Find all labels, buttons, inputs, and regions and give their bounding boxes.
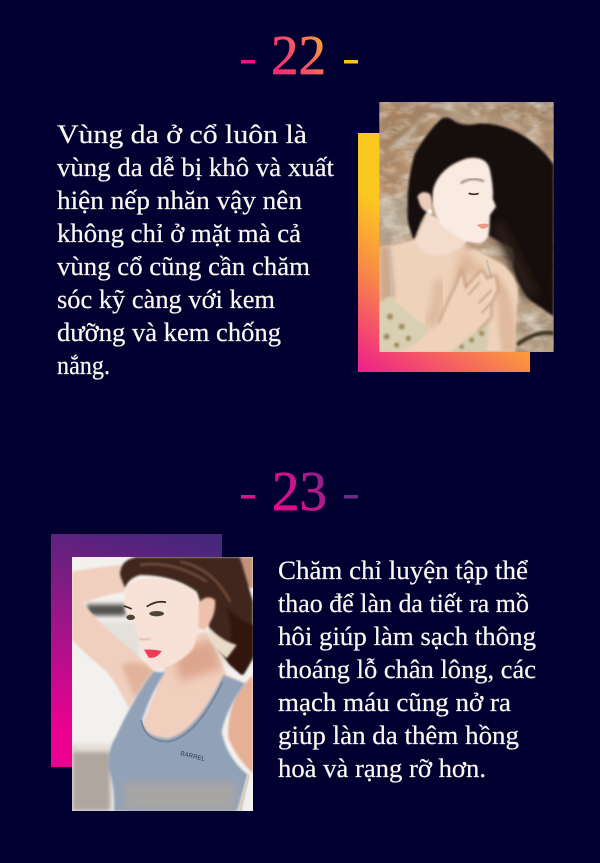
text block: exercise tip: Chăm chỉ luyện tập thể xyxy=(278,555,528,585)
heading: number 23: 23 xyxy=(272,461,327,523)
tank top xyxy=(108,672,248,811)
text block: neck care tip: Vùng da ở cổ luôn là xyxy=(57,119,307,149)
ear xyxy=(198,597,215,630)
text block: neck care tip: hiện nếp nhăn vậy nên xyxy=(57,185,302,215)
logo: BARREL xyxy=(180,750,206,763)
neck and chest xyxy=(142,632,240,738)
text block: exercise tip: thoáng lỗ chân lông, các xyxy=(278,654,536,684)
photo: woman in grey tank top xyxy=(72,557,253,811)
text block: exercise tip: mạch máu cũng nở ra xyxy=(278,687,511,717)
text block: exercise tip: hôi giúp làm sạch thông xyxy=(278,621,536,651)
text block: neck care tip: vùng da dễ bị khô và xuất xyxy=(57,152,335,182)
gradient frame: yellow to pink xyxy=(358,133,530,372)
hair xyxy=(120,557,253,675)
raised arm xyxy=(72,565,155,708)
text block: neck care tip: không chỉ ở mặt mà cả xyxy=(57,218,301,248)
text block: exercise tip xyxy=(278,555,536,783)
gradient frame: purple to magenta xyxy=(51,534,222,767)
brow eye lips xyxy=(461,179,484,183)
face xyxy=(124,578,199,670)
text block: exercise tip: hoà và rạng rỡ hơn. xyxy=(278,753,486,783)
text block: neck care tip xyxy=(57,119,335,380)
hand xyxy=(440,272,497,330)
text block: neck care tip: dưỡng và kem chống xyxy=(57,317,281,347)
heading: number 23 xyxy=(241,461,358,523)
neck and face xyxy=(415,213,473,256)
text block: exercise tip: giúp làn da thêm hồng xyxy=(278,720,519,750)
text block: neck care tip: sóc kỹ càng với kem xyxy=(57,284,275,314)
hair xyxy=(408,117,554,317)
photo: woman lying on rock xyxy=(379,102,554,352)
right arm xyxy=(228,675,253,773)
shoulders and chest xyxy=(379,237,518,352)
text block: neck care tip: vùng cổ cũng cần chăm xyxy=(57,251,310,281)
text block: exercise tip: thao để làn da tiết ra mồ xyxy=(278,588,529,618)
heading: number 22: 22 xyxy=(271,25,326,87)
heading: number 22 xyxy=(241,25,358,87)
ear xyxy=(417,192,432,213)
text block: neck care tip: nắng. xyxy=(57,350,110,380)
brows eyes nose lips xyxy=(124,602,166,609)
dress xyxy=(379,296,431,352)
